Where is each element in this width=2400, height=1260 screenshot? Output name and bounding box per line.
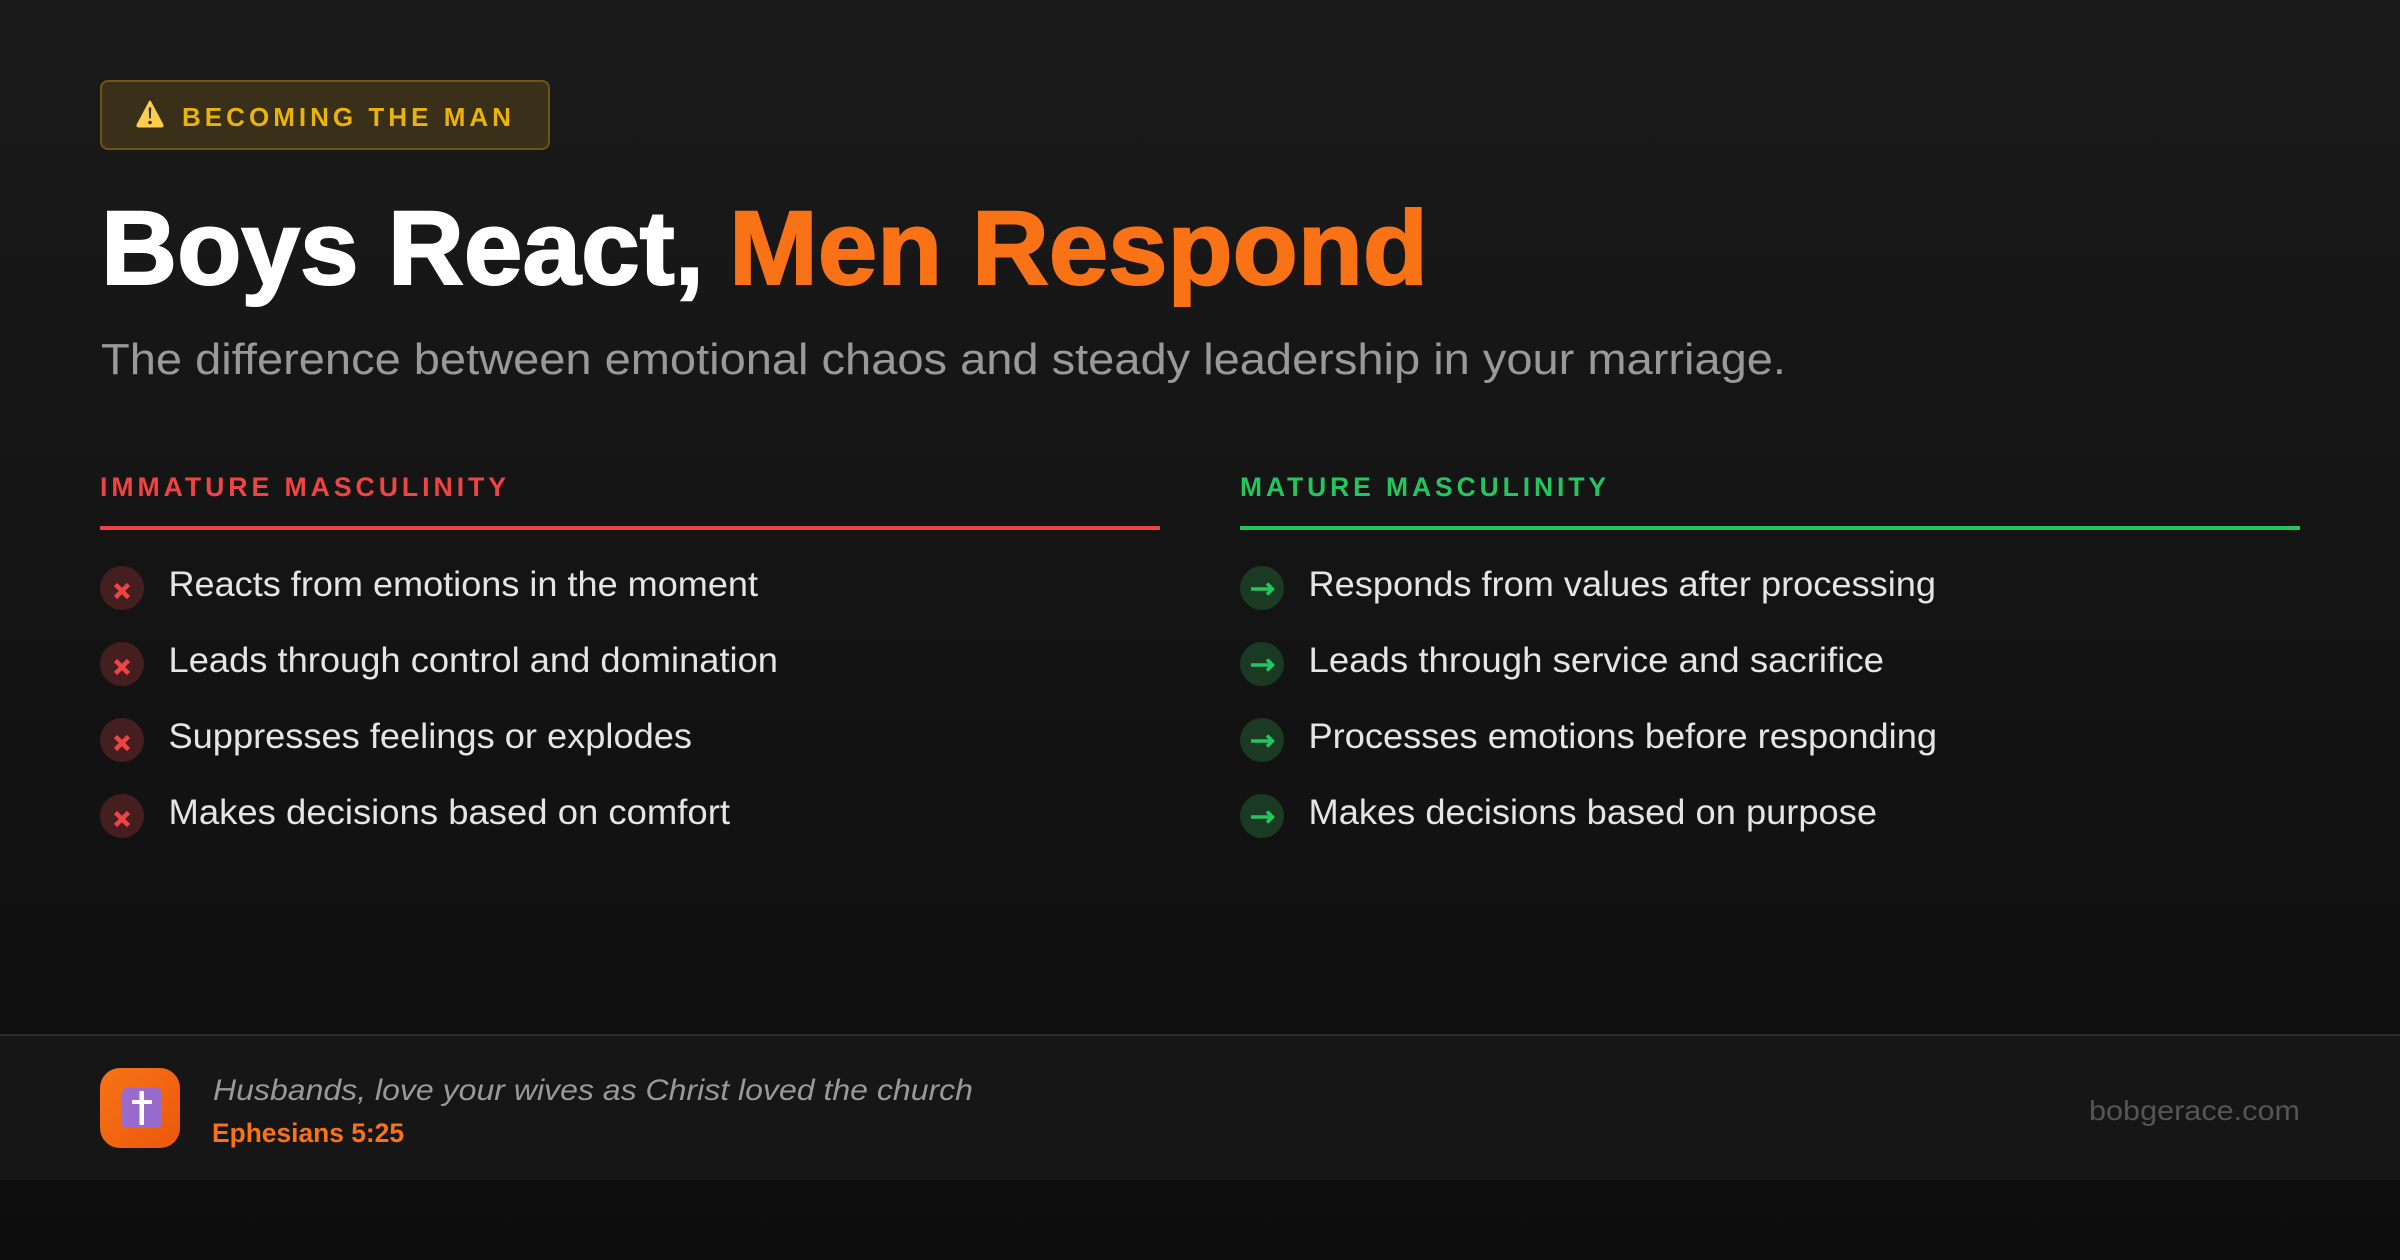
icon: cross [100,1068,180,1148]
icon: warning triangle [137,102,163,126]
heading: mature masculinity: MATURE MASCULINITY [1240,472,1610,502]
title: Men Respond [729,190,1428,307]
scripture quote: Husbands, love your wives as Christ loved the church [213,1074,973,1107]
website: bobgerace.com [2089,1095,2300,1126]
panel: immature masculinity [100,472,1160,838]
subtitle: The difference between emotional chaos and steady leadership in your marriage. [101,335,1786,384]
heading: immature masculinity: IMMATURE MASCULINITY [100,472,510,502]
list item: responds from values: Responds from values after processing [1308,565,1936,604]
panel: mature masculinity [1240,472,2300,838]
list item: leads through service: Leads through service and sacrifice [1308,641,1884,680]
list item: decisions on purpose: Makes decisions based on purpose [1308,793,1877,832]
list item: leads through control: Leads through control and domination [168,641,778,680]
footer [0,1034,2400,1180]
list item: processes emotions: Processes emotions before responding [1308,717,1937,756]
list item: decisions on comfort: Makes decisions based on comfort [168,793,730,832]
list item: reacts from emotions: Reacts from emotions in the moment [168,565,758,604]
scripture reference: Ephesians 5:25 [212,1118,404,1148]
badge label: BECOMING THE MAN [182,102,515,132]
title: Boys React, [101,190,704,307]
badge: becoming the man [101,81,549,149]
title [101,190,1428,307]
list item: suppresses feelings: Suppresses feelings or explodes [168,717,692,756]
